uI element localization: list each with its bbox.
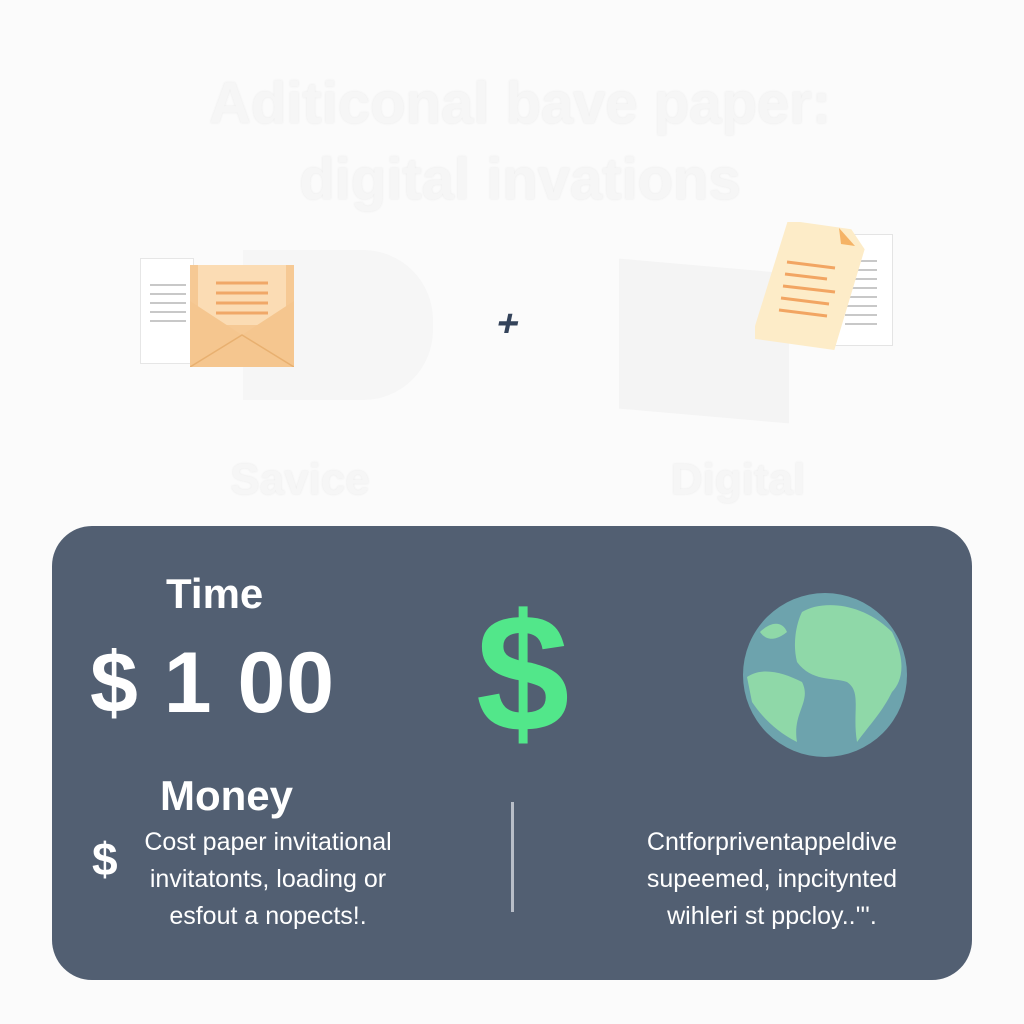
divider [511,802,514,912]
icon: digital document [755,222,893,350]
title [209,71,831,212]
heading: time: Time [166,570,263,617]
icon: paper envelope [140,258,294,367]
title: digital invations [299,147,741,212]
stat: $100: $ 1 00 [90,635,335,731]
heading: money: Money [160,772,293,819]
text: money description: Cost paper invitational invitatonts, loading or esfout a nopects!. [144,828,392,930]
icon: small dollar: $ [92,833,118,885]
panel: benefits [52,526,972,980]
icon: globe [743,593,907,757]
text: environment description: Cntforpriventappeldive supeemed, inpcitynted wihleri st ppcloy..'''. [647,828,897,930]
icon: green dollar: $ [476,579,569,767]
icon: plus: + [493,303,524,345]
label: digital: Digital [671,455,805,504]
label: savice: Savice [230,455,370,504]
title: Aditiconal bave paper: [209,71,831,136]
